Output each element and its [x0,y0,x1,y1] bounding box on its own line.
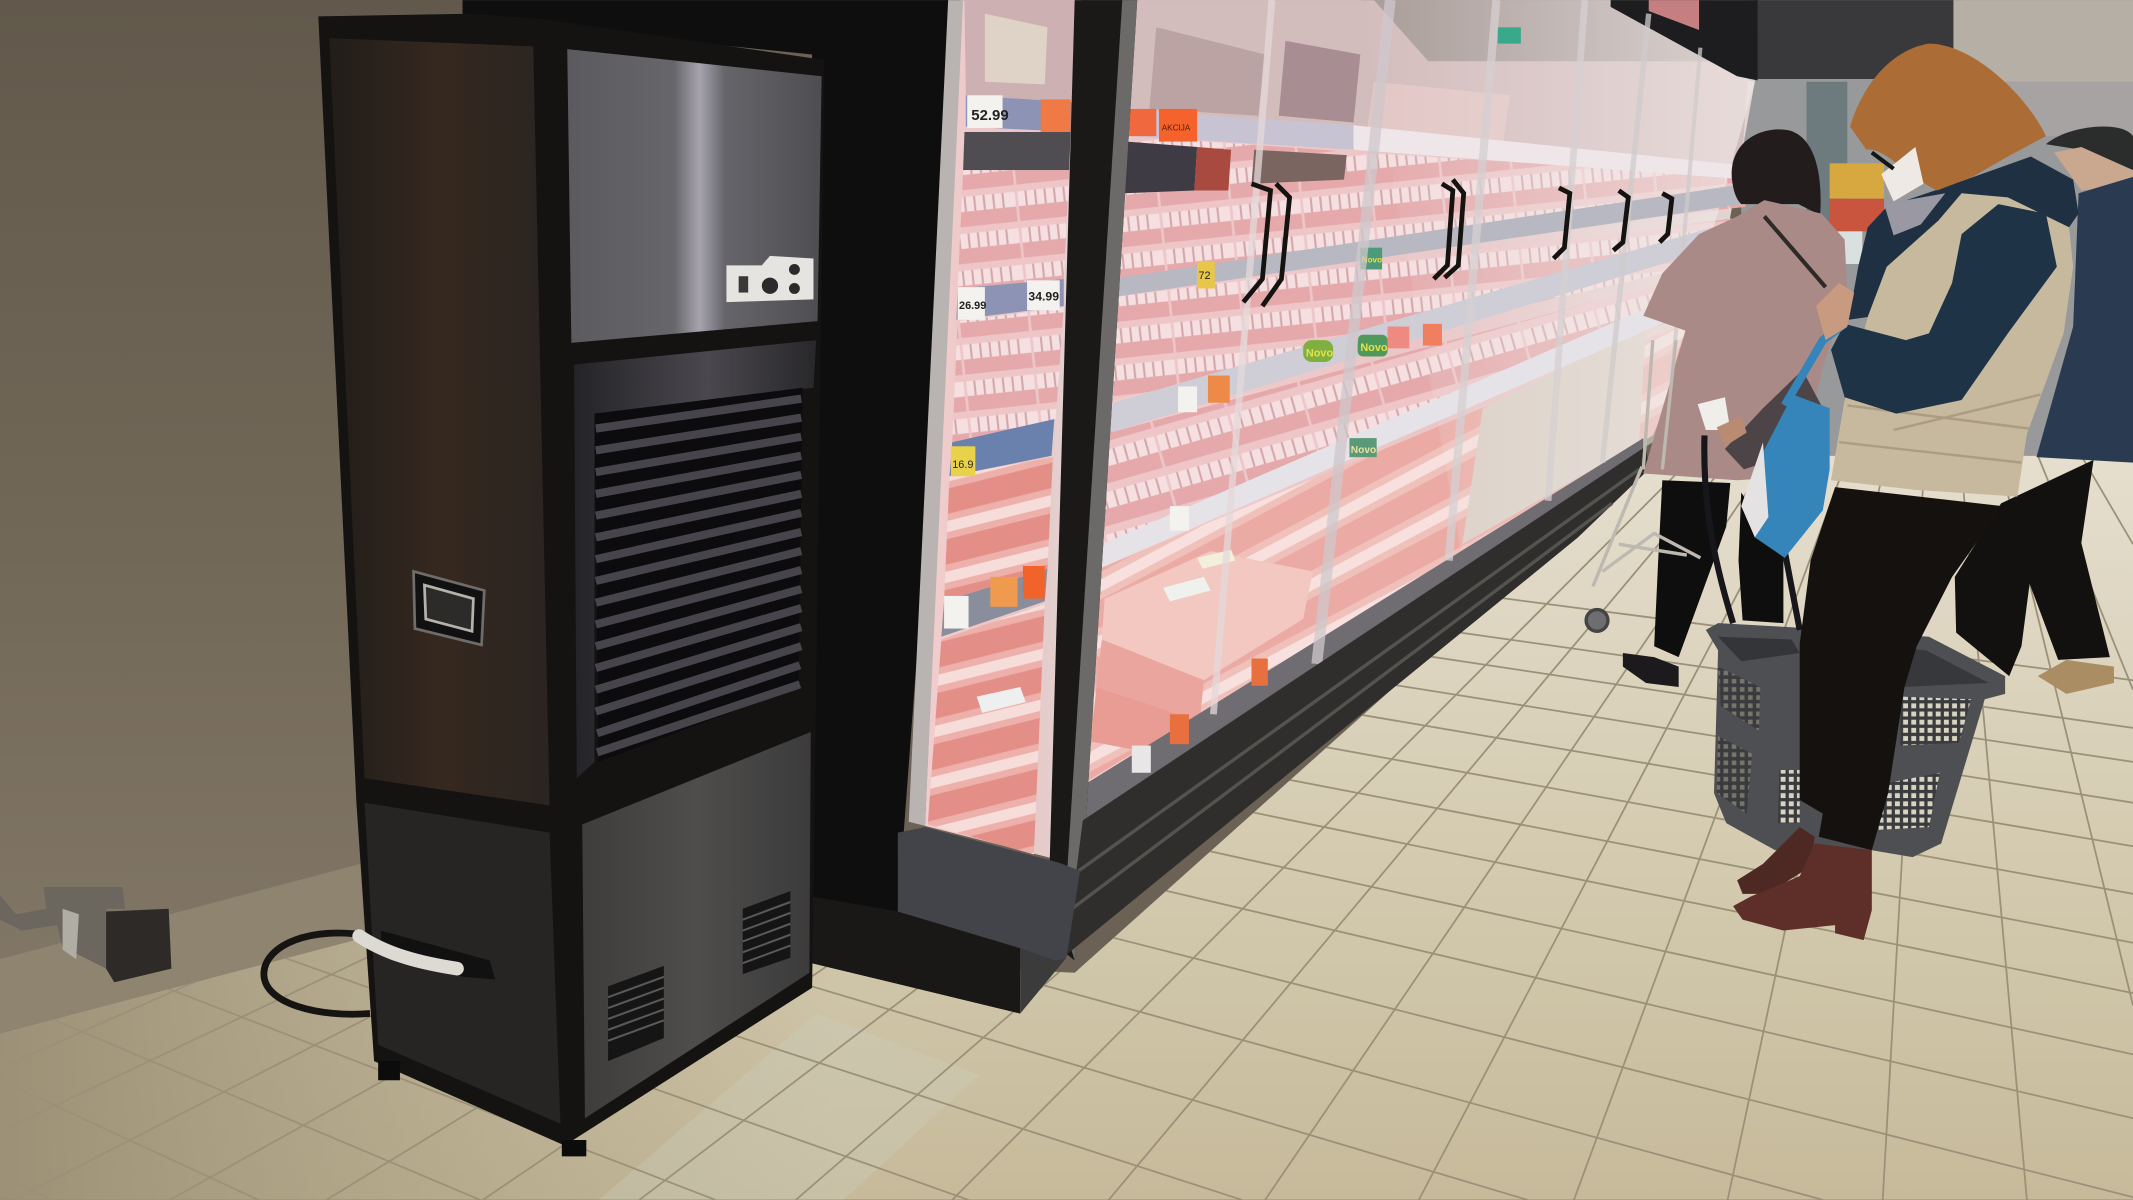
hands [1717,283,1854,446]
price rails [941,95,1748,819]
background store [1741,0,2133,476]
left door interior [925,0,1081,860]
blue bag [1744,395,1830,558]
boots [1737,827,1815,894]
price tags: Novo [1362,256,1382,265]
shopping cart [1586,340,1700,631]
dark handbag sleeve [1725,370,1823,469]
grille surround band [574,340,816,778]
price tags: Novo [1360,342,1388,354]
paper receipt [1698,397,1730,430]
price tags [944,95,1442,773]
exit sign [1498,27,1521,44]
louvre grille [594,388,803,762]
refrigerated display case [812,0,1758,1014]
lower front panel [582,732,811,1118]
left door label [977,687,1026,713]
door handles [1243,180,1672,306]
quilted vest [1831,193,2073,497]
main door interior [1081,0,1755,816]
case kick plate [1061,446,1649,959]
mask [1881,147,1924,201]
trousers [1800,487,2002,850]
floor tiles [0,456,2133,1200]
control panel [726,256,813,302]
price tags: 16.9 [952,459,973,471]
navy jacket [1849,157,2079,320]
dehumidifier unit [318,14,824,1156]
jacket sleeve [1831,204,2057,414]
wide door mullion [1047,0,1137,960]
scarf [1884,193,1945,235]
glass door frames [1213,0,1700,714]
unit body [318,14,824,1145]
steel top panel [567,49,822,343]
overhead header [1611,0,1758,80]
left lower panel [365,803,560,1124]
man in navy jacket [1955,126,2133,694]
black fridge end column [463,0,1020,1014]
price tags: 52.99 [971,107,1009,124]
cable [264,933,370,1014]
price tags: 34.99 [1028,290,1059,304]
lower vents [608,891,790,1061]
unit feet [378,1061,586,1156]
wall [0,0,469,1034]
glasses [1872,152,1894,169]
left upper panel [329,38,550,805]
carry handle [414,571,484,645]
large mince trays [1091,550,1313,762]
price tags: Novo [1351,445,1376,456]
price tags: 26.99 [959,300,986,312]
price tags: 72 [1198,270,1211,282]
wall bracket [0,887,171,982]
woman with basket [1698,44,2079,940]
plastic shopping basket [1704,435,2005,857]
drain hose [359,931,495,980]
woman in pink quilted coat [1623,129,1847,687]
hair [1850,44,2046,191]
case corner base [898,827,1080,960]
price tags: Novo [1306,348,1333,360]
price tags: AKCIJA [1162,124,1191,133]
